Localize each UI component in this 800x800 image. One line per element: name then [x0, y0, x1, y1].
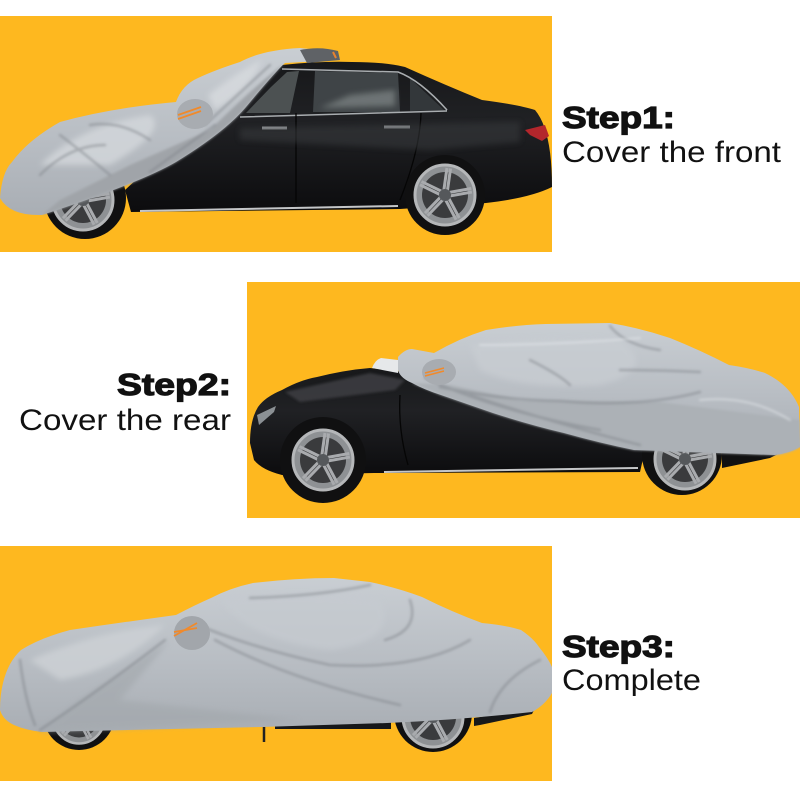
underbody	[275, 708, 535, 729]
silver cover draped over the rear	[398, 323, 800, 455]
black car body, rear part uncovered	[125, 62, 552, 212]
door lines and reflections	[240, 113, 520, 203]
front wheel	[44, 157, 126, 239]
side windows	[240, 69, 447, 117]
sill strip	[140, 206, 398, 211]
rear bumper	[722, 445, 782, 468]
text: cover the front: Cover the front	[562, 136, 782, 169]
mirror pocket	[422, 359, 456, 385]
mirror pocket	[177, 99, 213, 129]
black car body, front part uncovered	[250, 368, 645, 475]
panel: step 1 photo	[0, 16, 552, 252]
heading: step 3: Step3:	[562, 629, 675, 664]
panel: step 3 photo	[0, 546, 552, 781]
heading: step 2: Step2:	[117, 367, 231, 402]
tail light	[525, 125, 549, 141]
silver full cover	[0, 578, 552, 732]
rear wheel	[642, 415, 722, 495]
door line	[400, 395, 408, 465]
text: complete: Complete	[562, 664, 701, 697]
sill strip	[384, 468, 638, 472]
strap	[263, 727, 265, 742]
windshield flap	[372, 358, 398, 373]
front wheel	[280, 417, 366, 503]
text: cover the rear: Cover the rear	[19, 404, 231, 437]
mirror pocket	[174, 616, 210, 650]
rear wheel	[405, 155, 485, 235]
front wheel	[43, 678, 115, 750]
rear wheel	[394, 674, 472, 752]
heading: step 1: Step1:	[562, 100, 675, 135]
hood reflection	[285, 373, 405, 402]
headlight	[257, 406, 276, 425]
panel: step 2 photo	[247, 282, 800, 518]
silver cover draped over the front	[0, 48, 340, 215]
